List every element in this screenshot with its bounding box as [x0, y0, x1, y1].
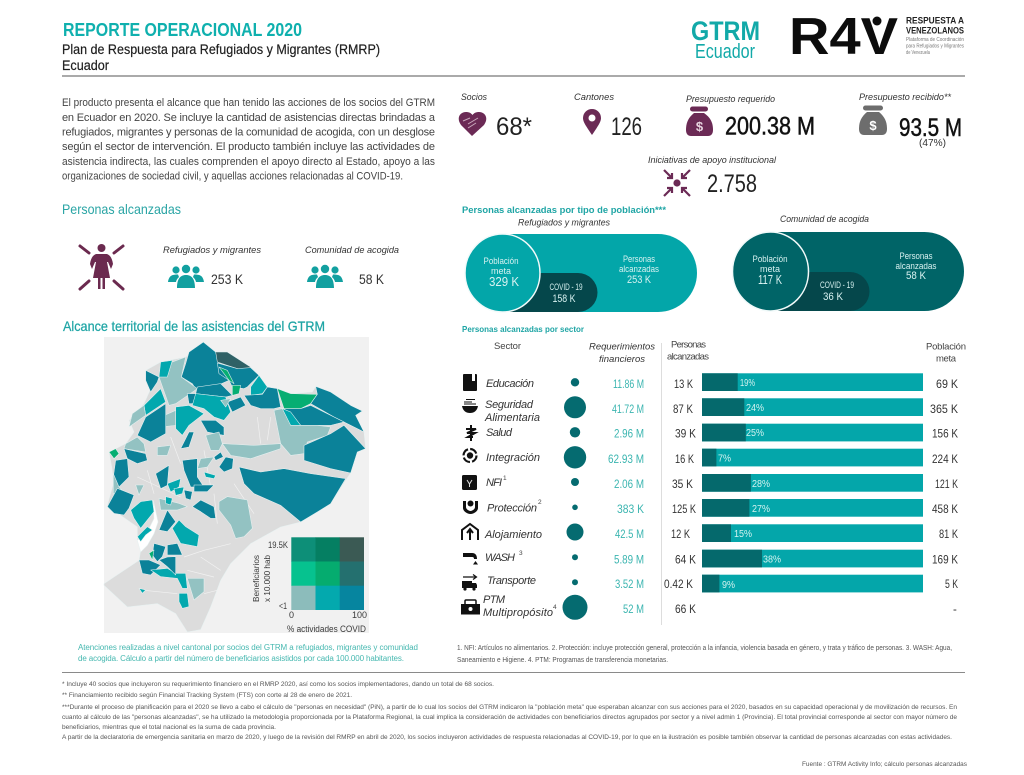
chart: refugiados y migrantes: Población	[484, 256, 518, 266]
row: Alojamiento: 15%	[734, 529, 752, 540]
row: Protección	[463, 499, 958, 517]
row: WASH: 169 K	[932, 554, 958, 566]
sector footnote: Saneamiento e Higiene. 4. PTM: Programas de transferencia monetarias.	[457, 657, 668, 664]
subtitle: Plan de Respuesta para Refugiados y Migrantes (RMRP)	[62, 42, 380, 57]
row: Transporte	[462, 574, 958, 592]
table headers: Sector	[494, 341, 521, 352]
row: Salud: 156 K	[932, 428, 958, 440]
map caption: de acogida. Cálculo a partir del número de beneficiarios asistidos por cada 100.000 habitantes.	[78, 654, 404, 663]
stat: socios: 68*	[496, 113, 532, 141]
legend: bivariate matrix: x 10.000 hab	[262, 555, 272, 602]
stat: presupuesto recibido: 93.5 M	[899, 114, 962, 142]
stat: presupuesto recibido: (47%)	[919, 137, 946, 149]
row: Alojamiento: 81 K	[939, 529, 958, 541]
row: Transporte: 9%	[722, 580, 735, 591]
row: Educación: 19%	[740, 378, 755, 389]
refugiados y migrantes: Refugiados y migrantes	[163, 245, 261, 256]
row: Salud: 2.96 M	[614, 428, 644, 440]
logo: R4V: Plataforma de Coordinación	[906, 37, 964, 43]
comunidad de acogida	[305, 245, 399, 288]
panel: personas alcanzadas	[62, 201, 399, 289]
chart: refugiados y migrantes: meta	[491, 266, 511, 276]
stat: iniciativas de apoyo institucional	[648, 155, 777, 198]
chart: refugiados y migrantes: Personas	[623, 254, 655, 264]
intro paragraph: El producto presenta el alcance que han tenido las acciones de los socios del GTRM	[62, 97, 435, 109]
row: Alojamiento: 42.5 M	[615, 529, 644, 541]
row: Seguridad Alimentaria	[462, 396, 958, 424]
row: Seguridad Alimentaria: Seguridad	[485, 399, 534, 411]
row: PTM Multipropósito: 66 K	[675, 604, 696, 616]
footnotes: beneficiarios, mientras que el total nacional es la suma de cada provincia.	[62, 724, 276, 731]
stat: cantones: 126	[611, 113, 642, 141]
chart: comunidad de acogida: 117 K	[758, 272, 782, 287]
stat: presupuesto requerido	[686, 94, 815, 140]
row: NFI: NFI	[486, 477, 502, 489]
row: PTM Multipropósito: PTM	[483, 594, 506, 606]
row: Salud: 25%	[746, 428, 764, 439]
stat: presupuesto requerido: Presupuesto requerido	[686, 94, 775, 105]
source: Fuente : GTRM Activity Info; cálculo personas alcanzadas	[802, 761, 968, 768]
chart: refugiados y migrantes	[465, 218, 697, 312]
legend: bivariate matrix: Beneficiarios	[251, 555, 261, 602]
row: Protección: 458 K	[932, 504, 958, 516]
stat: iniciativas de apoyo institucional: 2.758	[707, 170, 757, 198]
row: Seguridad Alimentaria: Alimentaria	[484, 412, 540, 424]
footnotes: ** Financiamiento recibido según Financial Tracking System (FTS) con corte al 28 de enero de 2021.	[62, 692, 352, 699]
row: PTM Multipropósito: Multipropósito	[483, 607, 553, 619]
row: WASH: 5.89 M	[614, 554, 644, 566]
panel: top statistics	[459, 92, 962, 198]
row: NFI: 2.06 M	[614, 479, 644, 491]
row: Transporte: 5 K	[945, 579, 958, 591]
chart: refugiados y migrantes: 329 K	[489, 274, 519, 289]
row: WASH: 3	[519, 550, 523, 557]
legend: bivariate matrix: 100	[352, 610, 367, 620]
chart: comunidad de acogida: Personas	[900, 251, 933, 261]
table headers: alcanzadas	[667, 352, 709, 362]
footnotes: ***Durante el proceso de planificación para el 2020 se llevo a cabo el cálculo de "personas en necesidad" (PiN), a partir de lo cual los socios del GTRM indicaron la "población meta" que esperaban alcanzar con sus acciones para el 2020, basados en su capacidad operacional y de movilización de recursos. En	[62, 704, 957, 711]
logo: R4V: R4V	[789, 8, 898, 66]
row: Transporte: 0.42 K	[664, 579, 693, 591]
logo: R4V: de Venezuela	[906, 50, 930, 56]
panel: map	[104, 337, 369, 634]
intro paragraph: refugiados, migrantes y personas de la comunidad de acogida, con un desglose	[62, 126, 435, 138]
logo: GTRM Ecuador: GTRM	[691, 16, 760, 46]
table headers: Población	[926, 342, 966, 352]
row: Integración: 224 K	[932, 454, 958, 466]
chart: comunidad de acogida: 58 K	[906, 270, 927, 282]
row: Seguridad Alimentaria: 87 K	[673, 404, 693, 416]
logo: GTRM Ecuador: Ecuador	[695, 41, 755, 63]
footnotes: * Incluye 40 socios que incluyeron su requerimiento financiero en el RMRP 2020, así como los socios implementadores, dando un total de 68 socios.	[62, 681, 494, 688]
table headers: financieros	[599, 354, 645, 365]
row: WASH: 38%	[763, 554, 781, 566]
refugiados y migrantes: 253 K	[211, 271, 244, 287]
panel: personas alcanzadas por tipo de población	[462, 205, 964, 312]
chart: comunidad de acogida: alcanzadas	[896, 261, 937, 271]
stat: presupuesto requerido: 200.38 M	[725, 112, 815, 140]
legend: bivariate matrix: % actividades COVID	[287, 624, 366, 634]
row: Integración: Integración	[486, 452, 540, 464]
chart: refugiados y migrantes: alcanzadas	[619, 264, 659, 274]
header	[62, 8, 964, 73]
row: Salud	[466, 424, 958, 441]
stat: iniciativas de apoyo institucional: Iniciativas de apoyo institucional	[648, 155, 777, 166]
logo: R4V	[789, 8, 964, 66]
stat: presupuesto recibido	[859, 92, 962, 149]
table headers: Personas	[671, 340, 706, 350]
chart: refugiados y migrantes: 158 K	[552, 293, 576, 305]
legend: bivariate matrix: 19.5K	[268, 540, 288, 550]
row: Educación: 69 K	[936, 379, 958, 391]
row: Educación: 13 K	[674, 379, 693, 391]
footnotes: cuanto al cálculo de las "personas alcanzadas", se ha utilizado la metodología proporcionada por la Plataforma Regional, la cual implica la consideración de actividades con beneficiarios directos agrupados por sector y a nivel admin 1 (Provincia). El total provincial corresponde al sector con mayor número de	[62, 714, 957, 721]
legend: bivariate matrix: 0	[289, 610, 294, 620]
chart: refugiados y migrantes: 253 K	[627, 274, 652, 286]
row: Protección: 2	[538, 499, 542, 506]
row: Integración	[464, 446, 958, 468]
refugiados y migrantes	[163, 245, 261, 288]
stat: presupuesto requerido: $	[696, 119, 704, 134]
legend: bivariate matrix	[251, 537, 367, 634]
footnotes: A partir de la declaratoria de emergencia sanitaria en marzo de 2020, y luego de la revisión del RMRP en abril de 2020, los socios incluyeron actividades de respuesta relacionadas al COVID-19, por lo que en la ilustración es posible también observar la cantidad de personas alcanzadas con estas actividades.	[62, 734, 952, 741]
row: NFI: 28%	[752, 479, 770, 490]
row: Salud: 39 K	[675, 428, 696, 440]
row: Educación: Educación	[486, 378, 534, 390]
chart: comunidad de acogida: COVID - 19	[820, 280, 854, 290]
map caption	[78, 643, 418, 663]
chart: comunidad de acogida: meta	[760, 264, 780, 274]
chart: comunidad de acogida: Comunidad de acogida	[780, 214, 869, 225]
legend: bivariate matrix: <1	[279, 601, 287, 611]
row: Protección: 27%	[752, 504, 770, 515]
heading: alcance territorial: Alcance territorial de las asistencias del GTRM	[63, 318, 325, 334]
sector footnote	[457, 645, 952, 664]
intro paragraph: asistencia indirecta, las cuales comprenden el apoyo directo al Estado, apoyo a las	[62, 156, 435, 168]
heading: Personas alcanzadas	[62, 201, 181, 217]
row: Salud: Salud	[486, 427, 513, 439]
intro paragraph	[62, 97, 436, 182]
logo: GTRM Ecuador	[691, 16, 760, 63]
row: NFI: 121 K	[935, 479, 958, 491]
row: Integración: 62.93 M	[608, 454, 644, 466]
row: Integración: 7%	[718, 454, 731, 464]
table headers: meta	[936, 354, 957, 364]
row: Seguridad Alimentaria: 41.72 M	[612, 404, 644, 416]
row: Seguridad Alimentaria: 24%	[746, 403, 764, 414]
row: Integración: 16 K	[675, 454, 694, 466]
sector footnote: 1. NFI: Artículos no alimentarios. 2. Protección: incluye protección general, protección a la infancia, violencia basada en género, y trata y tráfico de personas. 3. WASH: Agua,	[457, 645, 952, 652]
heading: Personas alcanzadas por tipo de población***	[462, 205, 666, 216]
row: NFI	[462, 474, 958, 492]
stat: presupuesto recibido: Presupuesto recibido**	[859, 92, 951, 103]
row: Protección: 125 K	[672, 504, 696, 516]
row: PTM Multipropósito: 52 M	[623, 604, 644, 616]
row: WASH: 64 K	[675, 554, 696, 566]
row: Seguridad Alimentaria: 365 K	[930, 404, 958, 416]
chart: comunidad de acogida	[732, 214, 964, 311]
row: WASH	[463, 550, 958, 567]
row: Educación	[463, 373, 958, 391]
row: PTM Multipropósito: -	[953, 604, 957, 616]
stat: cantones	[574, 92, 642, 141]
map of Ecuador	[104, 342, 366, 632]
row: Educación: 11.86 M	[613, 379, 644, 391]
stat: cantones: Cantones	[574, 92, 614, 103]
row: Transporte: 3.52 M	[615, 579, 644, 591]
chart: refugiados y migrantes: COVID - 19	[550, 282, 582, 292]
stat: socios: Socios	[461, 92, 487, 103]
heading: Personas alcanzadas por sector	[462, 324, 585, 334]
chart: comunidad de acogida: Población	[752, 254, 788, 264]
logo: R4V: RESPUESTA A	[906, 16, 964, 26]
chart: comunidad de acogida: 36 K	[823, 291, 844, 303]
title: REPORTE OPERACIONAL 2020	[63, 19, 302, 40]
logo: R4V: VENEZOLANOS	[906, 26, 964, 36]
chart: refugiados y migrantes: Refugiados y migrantes	[518, 218, 610, 228]
row: NFI: 35 K	[672, 479, 693, 491]
country: Ecuador	[62, 58, 109, 73]
footnotes	[62, 681, 957, 741]
intro paragraph: según el sector de intervención. El producto también incluye las actividades de	[62, 141, 435, 153]
row: Alojamiento	[462, 524, 958, 542]
row: NFI: 1	[503, 475, 507, 482]
row: Alojamiento: Alojamiento	[484, 529, 542, 541]
row: PTM Multipropósito: 4	[553, 604, 557, 611]
row: Transporte: Transporte	[487, 575, 536, 587]
row: WASH: WASH	[485, 552, 515, 564]
stat: socios	[459, 92, 532, 141]
logo: R4V: para Refugiados y Migrantes	[906, 44, 964, 50]
table headers	[494, 340, 966, 365]
map caption: Atenciones realizadas a nivel cantonal por socios del GTRM a refugiados, migrantes y comunidad	[78, 643, 418, 652]
table headers: Requerimientos	[589, 342, 655, 352]
row: Protección: Protección	[487, 502, 537, 514]
row: Protección: 383 K	[617, 504, 644, 516]
stat: presupuesto recibido: $	[869, 118, 877, 133]
intro paragraph: en Ecuador en 2020. Se incluye la cantidad de asistencias directas brindadas a	[62, 112, 436, 124]
comunidad de acogida: Comunidad de acogida	[305, 245, 399, 256]
row: PTM Multipropósito	[461, 594, 957, 620]
icon: person with arrows	[80, 244, 123, 289]
row: Alojamiento: 12 K	[671, 529, 690, 541]
panel: personas alcanzadas por sector	[457, 324, 966, 664]
intro paragraph: organizaciones de sociedad civil, y aquellas acciones relacionadas al COVID-19.	[62, 170, 403, 182]
comunidad de acogida: 58 K	[359, 271, 385, 287]
